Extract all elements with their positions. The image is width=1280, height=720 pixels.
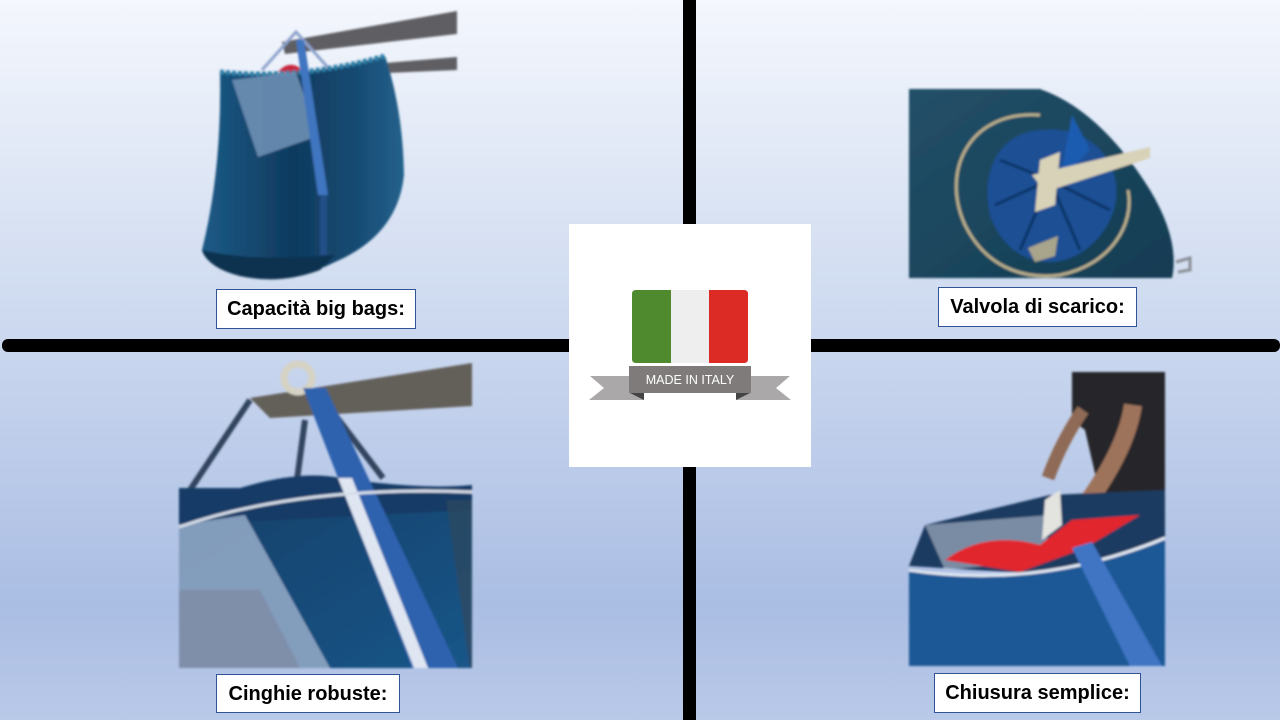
made in Italy ribbon: [589, 366, 791, 400]
label: Valvola di scarico: Valvola di scarico:: [950, 296, 1125, 318]
photo: strong straps: [179, 363, 472, 668]
label: Capacità big bags: [216, 289, 416, 329]
label: Capacità big bags: Capacità big bags:: [227, 298, 405, 320]
photo: simple closure: [909, 372, 1165, 666]
label: Chiusura semplice: [934, 673, 1141, 713]
Italian flag: [632, 290, 748, 363]
photo: discharge valve: [909, 89, 1190, 278]
made in Italy ribbon: MADE IN ITALY: [646, 373, 735, 387]
label: Valvola di scarico: [938, 287, 1137, 327]
label: Cinghie robuste: Cinghie robuste:: [229, 683, 387, 705]
photo: hanging big bag: [202, 11, 457, 279]
vertical divider: [683, 0, 696, 720]
centre white panel: [569, 224, 811, 467]
label: Chiusura semplice: Chiusura semplice:: [945, 682, 1130, 704]
horizontal divider: [2, 339, 1280, 352]
label: Cinghie robuste: [216, 674, 400, 713]
